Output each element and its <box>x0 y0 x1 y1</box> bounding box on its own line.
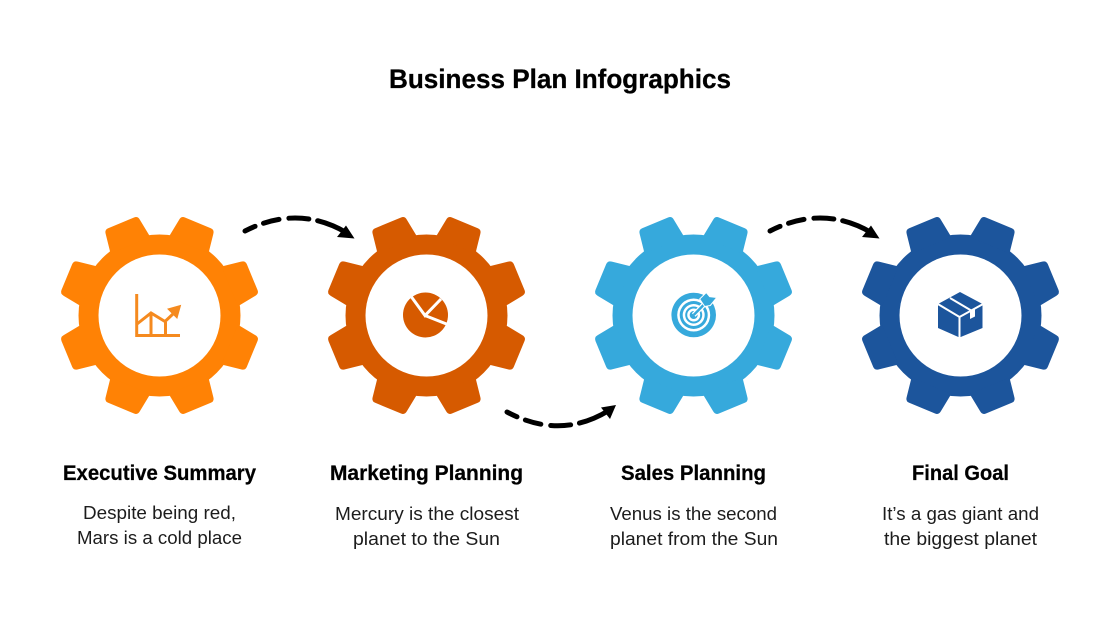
text block: executive summary: Despite being red, <box>83 503 236 523</box>
text block: marketing planning <box>330 462 523 549</box>
gear: executive summary <box>59 215 260 416</box>
text block: executive summary: Executive Summary <box>63 462 256 485</box>
icon: target <box>671 292 717 337</box>
text block: executive summary: Mars is a cold place <box>77 528 242 548</box>
icon: growth chart <box>137 294 180 336</box>
icon: pie chart <box>403 292 449 338</box>
text block: final goal: the biggest planet <box>884 529 1037 549</box>
text block: sales planning <box>610 462 778 549</box>
text block: sales planning: Sales Planning <box>621 462 766 485</box>
arrow: marketing to sales <box>507 405 616 426</box>
text block: final goal: It’s a gas giant and <box>882 504 1039 524</box>
text block: executive summary <box>63 462 256 548</box>
gear: sales planning <box>593 215 794 416</box>
text block: final goal: Final Goal <box>912 462 1009 485</box>
text block: marketing planning: Marketing Planning <box>330 462 523 485</box>
text block: marketing planning: planet to the Sun <box>353 529 500 549</box>
text block: sales planning: planet from the Sun <box>610 529 778 549</box>
text block: sales planning: Venus is the second <box>610 504 777 524</box>
title: Business Plan Infographics <box>389 64 731 94</box>
arrow: summary to marketing <box>245 218 354 238</box>
text block: final goal <box>882 462 1039 549</box>
text block: marketing planning: Mercury is the closest <box>335 504 519 524</box>
icon: box <box>937 292 984 338</box>
gear: final goal <box>860 215 1061 416</box>
gear: marketing planning <box>326 215 527 416</box>
arrow: sales to final goal <box>770 218 880 238</box>
